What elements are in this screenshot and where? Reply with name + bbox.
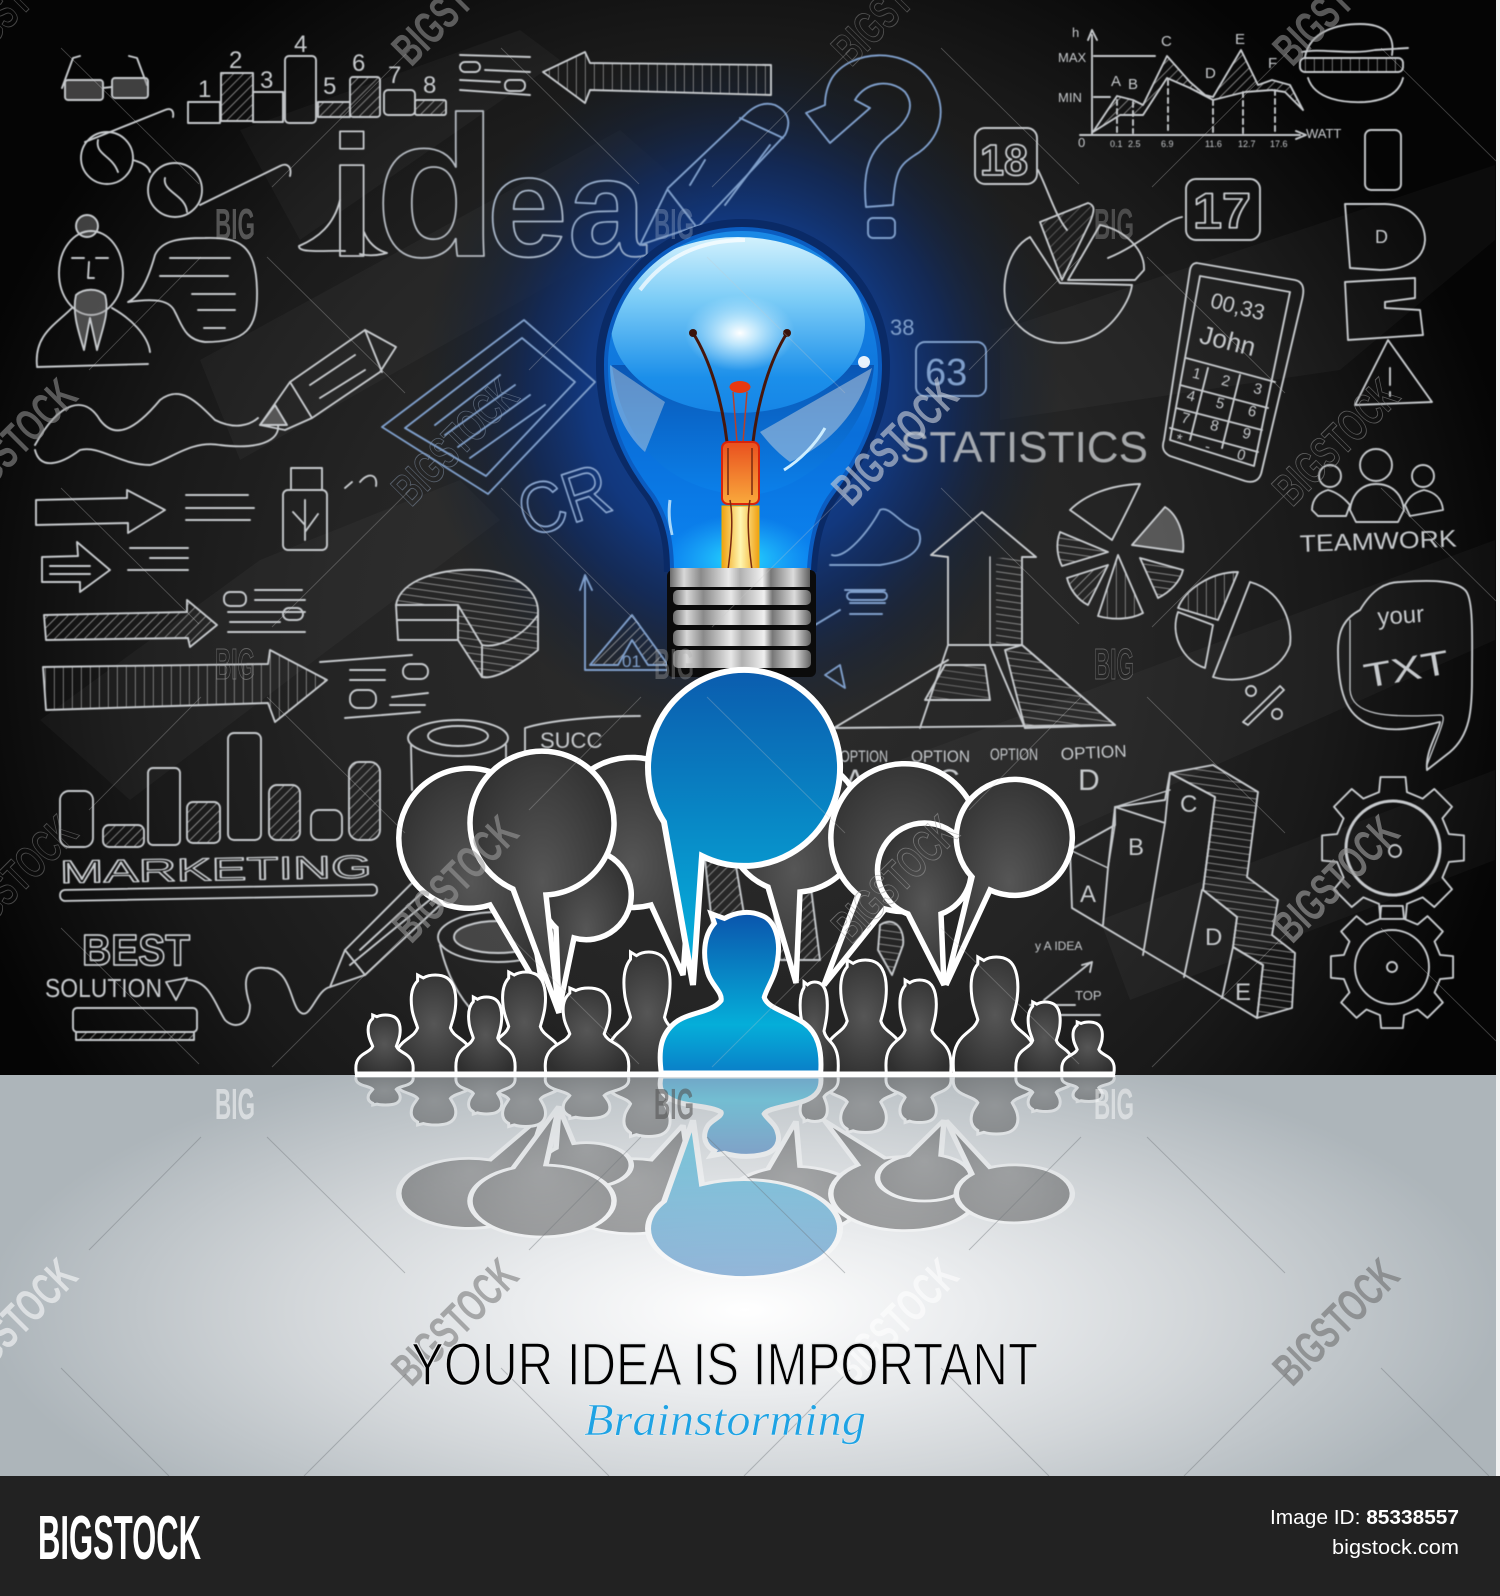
speech bubble: back right	[726, 756, 862, 983]
doodle: stat chart top right: h	[1072, 25, 1079, 40]
doodle: cup behind bubbles	[438, 912, 558, 1025]
chalk doodles	[35, 24, 1472, 1040]
doodle: 3D block chart ABCDE	[1070, 765, 1295, 1018]
doodle: pie chart with callouts 18 and 17: 18	[980, 136, 1028, 185]
person 6	[606, 952, 689, 1073]
doodle: marketing label	[59, 849, 377, 901]
speech bubble: far left	[399, 768, 544, 997]
doodle: small triangle chart near bulb	[580, 575, 845, 688]
watermark: BIGSTOCK marks: BIGSTOCK	[822, 369, 968, 515]
doodle: best solution with squiggle and pencil: BEST	[82, 926, 190, 975]
watermark: BIG marks: BIG	[654, 200, 694, 249]
doodle: tablet	[382, 320, 595, 494]
doodle: 3D block chart ABCDE: C	[1180, 791, 1197, 818]
doodle: big striped arrow with notes	[43, 650, 428, 722]
person 7	[790, 982, 838, 1073]
bulb glass	[604, 227, 882, 570]
bulb highlight spark	[858, 356, 870, 368]
doodle: stat chart top right: MIN	[1058, 90, 1082, 105]
doodle: vertical letters IDEA: D	[1375, 227, 1388, 247]
watermark: BIG marks: BIG	[654, 640, 694, 689]
doodle: marker pen	[640, 104, 788, 245]
doodle: option labels	[840, 742, 1127, 797]
doodle: option labels: C	[938, 764, 960, 797]
speech bubble: far right	[946, 779, 1072, 985]
doodle: best solution with squiggle and pencil: SOLUTION	[45, 973, 162, 1003]
doodle: marketing bar chart	[60, 733, 380, 847]
doodle: 3D pie with slice removed	[396, 570, 538, 677]
doodle: top star note	[1030, 939, 1102, 1015]
doodle: stat chart top right: 6.9	[1161, 139, 1174, 149]
doodle: your TXT speech bubble	[1338, 581, 1472, 770]
doodle: mobile phone John: -	[1203, 438, 1212, 456]
doodle: stat chart top right: 12.7	[1238, 139, 1256, 149]
watermark: BIGSTOCK marks: BIGSTOCK	[1263, 369, 1409, 515]
subtitle: Brainstorming: Brainstorming	[584, 1394, 866, 1445]
person 12	[1062, 1022, 1114, 1073]
doodle: partial word CRE: CR	[508, 449, 620, 553]
person 9	[886, 980, 951, 1073]
doodle: number block 63: 63	[925, 352, 967, 394]
doodle: teamwork figures: TEAMWORK	[1299, 526, 1457, 558]
light bulb	[596, 219, 890, 677]
doodle: stat chart top right: 0.1	[1110, 139, 1123, 149]
crowd reflection on floor	[355, 1075, 1115, 1278]
speech bubble: small left	[541, 850, 631, 1010]
doodle: marker with ink wave	[35, 330, 396, 465]
doodle: stat chart top right: 11.6	[1205, 139, 1222, 149]
watermark: BIG marks: BIG	[1094, 640, 1134, 689]
doodle: bubble word idea: e	[487, 125, 568, 287]
person 10	[953, 957, 1037, 1073]
doodle: cloud and notes beside bulb	[815, 509, 920, 625]
doodle: mobile phone John: 7	[1179, 409, 1192, 428]
doodle: usb stick	[283, 468, 376, 550]
watermark: BIGSTOCK marks: BIGSTOCK	[382, 1249, 528, 1395]
watermark: BIGSTOCK marks: BIGSTOCK	[822, 1249, 968, 1395]
watermark: BIG marks: BIG	[215, 640, 255, 689]
doodle: stat chart top right	[1058, 25, 1341, 150]
doodle: your TXT speech bubble: your	[1377, 601, 1425, 631]
doodle: mobile phone John	[1163, 263, 1303, 482]
blackboard background	[0, 0, 1500, 1076]
filament bead	[730, 381, 750, 393]
bulb screw base	[670, 568, 811, 668]
doodle: small gear	[1331, 906, 1453, 1028]
doodle: top star note: TOP	[1075, 988, 1102, 1003]
doodle: numbered step bar chart: 7	[388, 62, 401, 89]
doodle: big left arrow	[543, 52, 771, 103]
doodle: question mark	[806, 55, 941, 238]
bulb filament wires	[693, 333, 787, 442]
doodle: best solution with squiggle and pencil	[45, 880, 440, 1040]
doodle: vertical letters IDEA	[1345, 130, 1432, 405]
doodle: stat chart top right: F	[1268, 55, 1277, 72]
bulb stem inner wires	[728, 448, 752, 570]
doodle: pie chart with callouts 18 and 17: 17	[1193, 183, 1251, 239]
main blue person	[660, 912, 821, 1073]
doodle: stat chart top right: 17.6	[1270, 139, 1288, 149]
doodle: mobile phone John: 2	[1220, 372, 1232, 391]
watermark: BIGSTOCK marks: BIGSTOCK	[822, 806, 968, 952]
doodle: pie chart with callouts 18 and 17	[975, 128, 1260, 343]
doodle: stat chart top right: C	[1161, 33, 1172, 50]
footer image id: Image ID: 85338557	[1270, 1507, 1459, 1529]
doodle: top star note: y A IDEA	[1035, 939, 1082, 953]
right edge strip	[1496, 0, 1500, 1476]
watermark: BIG marks	[215, 200, 1134, 1129]
doodle: 3D block chart ABCDE: D	[1205, 924, 1222, 951]
doodle: pyramid with arrow	[834, 512, 1115, 728]
doodle: numbered step bar chart: 2	[229, 47, 242, 74]
doodle: small note lines top	[460, 55, 530, 95]
bulb stem lower	[722, 506, 759, 570]
headline: YOUR IDEA IS IMPORTANT	[411, 1331, 1038, 1398]
doodle: bubble word idea	[299, 76, 647, 299]
doodle: stat chart top right: 2.5	[1128, 139, 1141, 149]
doodle: hatched arrow three with notes	[44, 590, 305, 647]
doodle: numbered step bar chart: 6	[352, 50, 365, 77]
doodle: statistics word: STATISTICS	[900, 423, 1148, 472]
doodle: 3D block chart ABCDE: A	[1080, 881, 1096, 908]
watermark: BIG marks: BIG	[654, 1080, 694, 1129]
doodle: mobile phone John: 4	[1185, 387, 1197, 406]
doodle: numbered step bar chart	[188, 31, 446, 123]
doodle: mobile phone John: 9	[1240, 425, 1253, 443]
doodle: number block 63	[890, 315, 986, 396]
person 8	[823, 960, 905, 1073]
doodle: stat chart top right: E	[1235, 31, 1245, 48]
footer bar	[0, 1476, 1500, 1596]
doodle: hatched figures behind bubbles	[705, 860, 903, 975]
blue glow behind bulb	[420, 40, 1060, 740]
bulb stem upper	[722, 442, 759, 504]
doodle: option labels: OPTION	[840, 747, 888, 766]
doodle: can and box behind bubbles: SUCC	[540, 728, 602, 753]
doodle: option labels: OPTION	[1060, 742, 1127, 764]
watermark: BIGSTOCK marks: BIGSTOCK	[382, 369, 528, 515]
doodle: stat chart top right: 0	[1078, 135, 1085, 150]
watermark: BIG marks: BIG	[215, 200, 255, 249]
watermark: BIGSTOCK marks: BIGSTOCK	[1263, 806, 1409, 952]
doodle: burger	[1300, 24, 1408, 102]
doodle: numbered step bar chart: 5	[323, 73, 336, 100]
doodle: large gear	[1322, 777, 1464, 919]
footer site: bigstock.com	[1332, 1537, 1459, 1559]
watermark: BIG marks: BIG	[215, 1080, 255, 1129]
speech bubble: back left	[557, 757, 707, 975]
speech bubble: left front	[470, 751, 614, 1013]
footer logo: BIGSTOCK	[38, 1504, 201, 1573]
person 2	[394, 975, 474, 1073]
bulb glass rim	[596, 219, 890, 572]
doodle: stat chart top right: A	[1111, 73, 1121, 90]
doodle: mobile phone John: 5	[1214, 394, 1226, 413]
person 1	[356, 1015, 413, 1073]
crowd with speech bubbles	[355, 670, 1115, 1075]
doodle: numbered step bar chart: 4	[294, 31, 307, 58]
watermark: BIGSTOCK marks: BIGSTOCK	[382, 806, 528, 952]
doodle: 3D block chart ABCDE: B	[1128, 834, 1144, 861]
doodle: numbered step bar chart: 3	[260, 67, 273, 94]
doodle: sunglasses	[62, 56, 148, 100]
chalk brush streaks	[40, 30, 1495, 1000]
doodle: stat chart top right: B	[1128, 76, 1138, 93]
speech bubble: right small	[877, 823, 971, 985]
doodle: bubble word idea: a	[568, 129, 647, 286]
doodle: small triangle chart near bulb: 01	[622, 652, 641, 671]
doodle: option labels: OPTION	[911, 747, 970, 766]
person 5	[545, 988, 629, 1073]
doodle: bubble word idea: i	[328, 101, 376, 293]
doodle: option labels: D	[1078, 764, 1100, 797]
doodle: mobile phone John: 3	[1252, 380, 1264, 399]
audience silhouettes	[356, 952, 1114, 1073]
person 11	[1016, 1002, 1073, 1073]
doodle: stat chart top right: MAX	[1058, 50, 1086, 65]
watermark: BIG marks: BIG	[1094, 200, 1134, 249]
doodle: mobile phone John: 00,33	[1208, 288, 1267, 325]
doodle: teamwork figures	[1299, 449, 1457, 558]
doodle: mobile phone John: *	[1174, 431, 1184, 449]
watermark: BIGSTOCK marks: BIGSTOCK	[1263, 1249, 1409, 1395]
doodle: mobile phone John: 0	[1235, 446, 1247, 465]
doodle: numbered step bar chart: 1	[198, 76, 211, 103]
doodle: round glasses	[81, 109, 291, 217]
doodle: stat chart top right: WATT	[1306, 126, 1341, 141]
floor line	[355, 1073, 1115, 1077]
doodle: mobile phone John: 6	[1246, 402, 1258, 421]
doodle: 3D block chart ABCDE: E	[1235, 979, 1251, 1006]
watermark: BIG marks: BIG	[1094, 1080, 1134, 1129]
doodle: marketing label: MARKETING	[59, 849, 372, 890]
doodle: can and box behind bubbles	[408, 716, 640, 790]
doodle: option labels: OPTION	[990, 745, 1038, 764]
doodle: option labels: A	[845, 764, 865, 797]
doodle: bubble word idea: d	[375, 76, 497, 299]
bulb inner glass and reflections	[608, 231, 878, 568]
doodle: numbered step bar chart: 8	[423, 72, 436, 99]
speech bubble: right large	[824, 764, 979, 985]
doodle: exploded pie slices	[1057, 484, 1183, 619]
speech bubble: main blue	[648, 670, 840, 985]
doodle: mobile phone John: John	[1197, 319, 1259, 362]
bulb screw shadow	[667, 570, 816, 677]
person 4	[486, 972, 563, 1073]
doodle: your TXT speech bubble: TXT	[1361, 644, 1452, 696]
doodle: mobile phone John: 1	[1190, 365, 1203, 383]
doodle: mobile phone John: 8	[1208, 417, 1221, 435]
filament tips	[689, 329, 791, 337]
doodle: arrow one with notes	[36, 490, 254, 533]
floor panel	[0, 1075, 1500, 1476]
doodle: stat chart top right: D	[1205, 65, 1216, 82]
doodle: split pie with percent	[1176, 572, 1290, 725]
doodle: number block 63: 38	[890, 315, 914, 340]
doodle: arrow two with notes	[42, 542, 188, 592]
doodle: wise man with speech bubble	[37, 215, 257, 367]
person 3	[456, 997, 515, 1073]
